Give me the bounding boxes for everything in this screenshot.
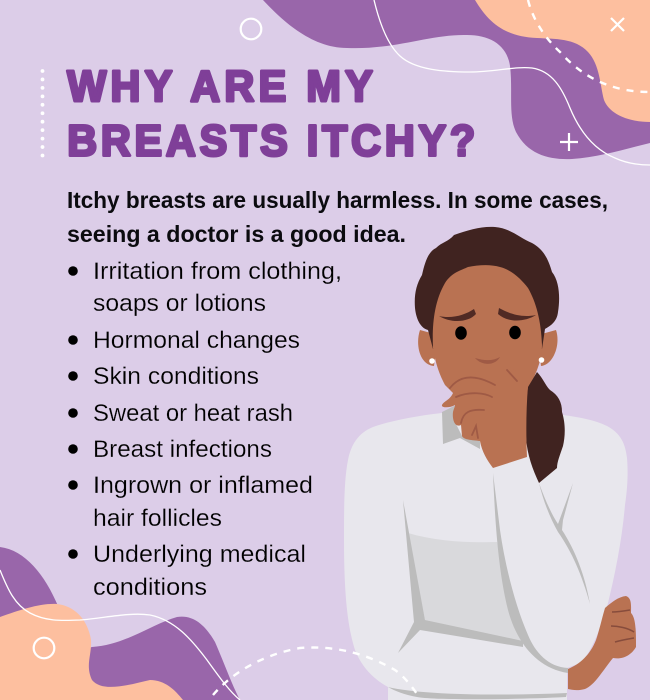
shirt [344,413,628,700]
face [433,265,542,395]
hand and neck [442,363,528,468]
right hand creases [611,610,634,642]
illustration: worried woman [344,227,636,700]
shirt chest shadow [408,533,523,642]
right hand [568,596,636,690]
list of causes [68,258,342,601]
intro text: Itchy breasts are usually harmless. In some cases, [67,187,608,213]
list of causes: Hormonal changes [93,327,300,354]
hair [415,227,559,349]
list of causes: soaps or lotions [93,290,266,317]
list of causes: hair follicles [93,505,222,532]
icon: cross [611,18,624,31]
shirt folds [388,473,590,699]
icon: ring bottom [34,638,54,658]
dotted vertical line [41,71,44,159]
nose [475,357,500,364]
earrings [429,358,435,364]
ponytail [526,372,565,483]
intro text: seeing a doctor is a good idea. [67,221,406,247]
list of causes: Sweat or heat rash [93,400,293,427]
title: WHY ARE MY [67,62,373,111]
ears [418,330,558,366]
title [67,62,475,166]
list of causes: Skin conditions [93,363,259,390]
collar [442,405,480,449]
icon: plus [560,133,578,151]
list of causes: Irritation from clothing, [93,258,342,285]
intro text [67,187,608,247]
bottom left decorative blobs [0,547,240,700]
eyebrows [439,308,536,321]
list of causes: Ingrown or inflamed [93,472,313,499]
title: BREASTS ITCHY? [67,116,475,166]
eyes [455,326,467,340]
dashed arc [213,648,419,697]
list of causes: conditions [93,574,207,601]
finger creases [450,370,517,438]
icon: ring top [241,19,261,39]
list of causes: Underlying medical [93,541,306,568]
top right decorative blobs [263,0,650,165]
list of causes: Breast infections [93,436,272,463]
